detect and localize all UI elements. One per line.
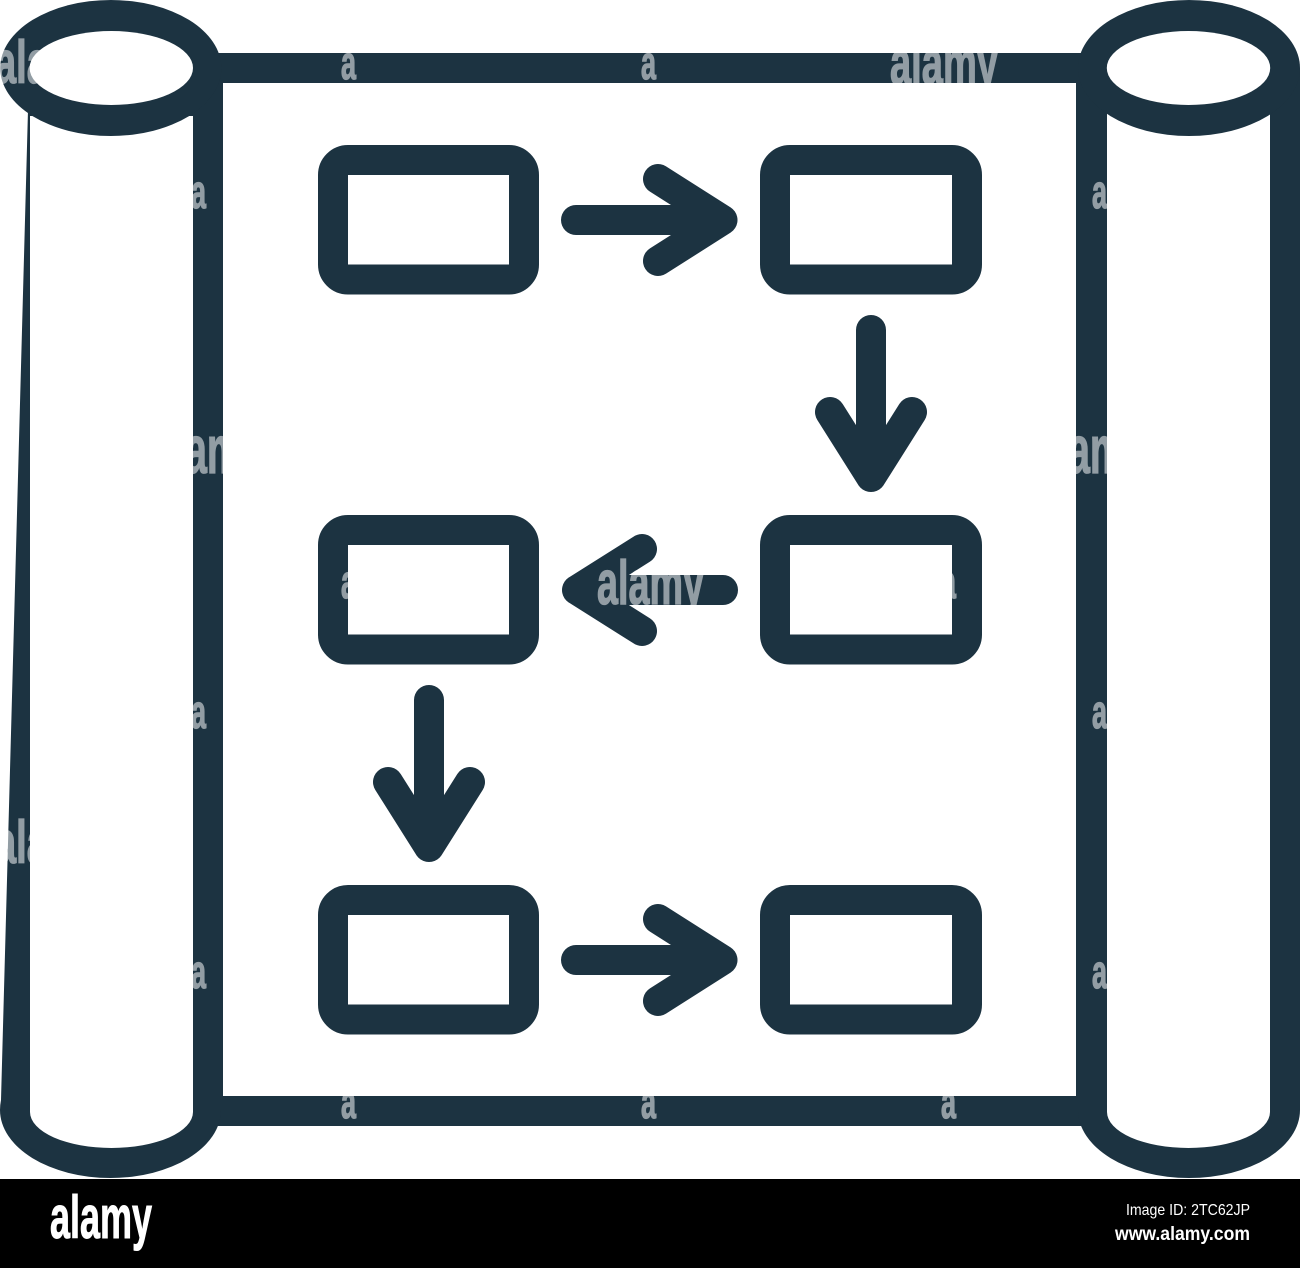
arrow: down, right column xyxy=(830,330,912,477)
watermarks: a xyxy=(191,945,206,998)
watermarks: alamy xyxy=(597,549,704,618)
box: row 2 left xyxy=(333,530,524,650)
arrow: down, left column xyxy=(388,700,470,847)
watermarks: alamy xyxy=(1035,412,1147,488)
watermarks: a xyxy=(941,1075,956,1128)
watermarks xyxy=(0,29,1147,1128)
footer website: www.alamy.com xyxy=(1114,1224,1250,1245)
box: row 1 right xyxy=(775,160,967,280)
arrow: right, row 3 xyxy=(576,919,722,1001)
watermarks: alamy xyxy=(0,29,103,96)
watermarks: a xyxy=(191,685,206,738)
box: row 3 right xyxy=(775,900,967,1020)
watermarks: a xyxy=(941,555,956,608)
watermarks: alamy xyxy=(152,412,264,488)
watermarks: a xyxy=(1092,165,1107,218)
panel: right scroll roll xyxy=(1076,0,1300,1178)
box: row 2 right xyxy=(775,530,967,650)
watermarks: a xyxy=(1092,945,1107,998)
footer bar xyxy=(0,1179,1300,1268)
arrow: left, row 2 xyxy=(577,549,723,631)
panel: left scroll roll xyxy=(0,0,223,1178)
panel: scroll top edge xyxy=(200,53,1100,83)
watermarks: a xyxy=(641,36,656,89)
watermarks: alamy xyxy=(890,29,998,98)
arrow: right, row 1 xyxy=(576,179,722,261)
flowchart boxes and arrows xyxy=(333,160,967,1020)
watermarks: a xyxy=(341,555,356,608)
watermarks: a xyxy=(1092,685,1107,738)
watermarks: a xyxy=(641,1075,656,1128)
watermarks: a xyxy=(341,1075,356,1128)
watermarks: a xyxy=(341,36,356,89)
footer logo: alamy: alamy xyxy=(50,1184,152,1251)
box: row 1 left xyxy=(333,160,524,280)
box: row 3 left xyxy=(333,900,524,1020)
panel: scroll bottom edge xyxy=(200,1096,1100,1126)
watermarks: alamy xyxy=(0,809,103,876)
footer image id: Image ID: 2TC62JP xyxy=(1126,1202,1250,1219)
watermarks: a xyxy=(191,165,206,218)
